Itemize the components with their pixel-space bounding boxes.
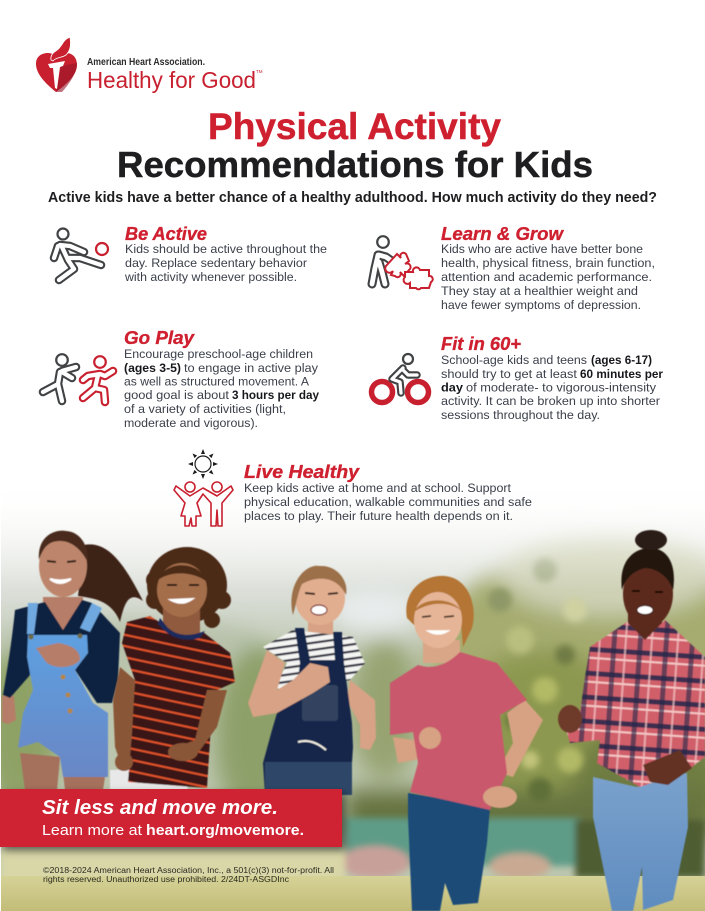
body text: School-age kids and teens (441, 353, 587, 367)
body text: should try to get at least (441, 367, 578, 381)
text: American Heart Association: American Heart Association. (87, 56, 205, 68)
body text: places to play. Their future health depends on it. (244, 509, 513, 523)
body text: physical education, walkable communities and safe (244, 495, 532, 509)
body text: as well as structured movement. A (124, 374, 310, 388)
body text: day. Replace sedentary behavior (125, 256, 307, 270)
banner headline: Sit less and move more. (42, 797, 278, 819)
footer copyright: ©2018-2024 American Heart Association, Inc., a 501(c)(3) not-for-profit. All (43, 866, 334, 875)
body text: sessions throughout the day. (441, 408, 600, 422)
body text: (ages 3-5) (124, 361, 181, 375)
banner: Sit less and move more (0, 789, 342, 847)
banner link text (42, 822, 304, 839)
body text: of a variety of activities (light, (124, 402, 286, 416)
kid 1: blue overalls (2, 531, 143, 790)
footer copyright (43, 866, 334, 884)
body text: Keep kids active at home and at school. Support (244, 481, 512, 495)
heading: Live Healthy (244, 462, 360, 482)
kid 5: plaid shirt and light jeans (558, 530, 705, 911)
text: trademark: TM (256, 69, 263, 74)
body text (124, 347, 319, 430)
body text: Kids who are active have better bone (441, 242, 643, 256)
heading: Fit in 60+ (441, 334, 521, 354)
icon: two kids running (43, 354, 113, 402)
title: Recommendations for Kids: Recommendations for Kids (117, 144, 593, 185)
banner link text: heart.org/movemore. (146, 822, 304, 839)
body text (441, 242, 655, 312)
kid 4: pink t-shirt and blue jeans (390, 576, 543, 911)
panel: Be Active (54, 224, 327, 284)
text: Healthy for Good: Healthy for Good (87, 67, 256, 93)
body text: moderate and vigorous). (124, 416, 258, 430)
icon: kid on bicycle (372, 354, 428, 402)
icon: heart and torch (36, 37, 77, 92)
icon: kid kicking ball (54, 228, 108, 280)
panel: Live Healthy (174, 449, 532, 526)
panel: Go Play (43, 328, 319, 430)
body text: (ages 6-17) (591, 353, 652, 367)
body text: 60 minutes per (580, 367, 663, 381)
heading: Be Active (125, 224, 207, 244)
subtitle: Active kids have a better chance of a healthy adulthood. How much activity do they need? (48, 190, 657, 206)
heading: Go Play (124, 328, 195, 348)
body text (441, 353, 663, 422)
photo: five kids running in a park (1, 522, 705, 911)
body text: health, physical fitness, brain function, (441, 256, 655, 270)
body text: 3 hours per day (232, 388, 319, 402)
body text (244, 481, 532, 523)
banner link text: Learn more at (42, 822, 143, 839)
title: Physical Activity: Physical Activity (208, 106, 501, 147)
body text: Kids should be active throughout the (125, 242, 327, 256)
kid 3: white striped tee and dark overalls (248, 566, 376, 795)
body text: activity. It can be broken up into shorter (441, 394, 660, 408)
body text: have fewer symptoms of depression. (441, 298, 641, 312)
body text: Encourage preschool-age children (124, 347, 313, 361)
body text: to engage in active play (184, 361, 319, 375)
photo background: sky, trees and lawn (1, 522, 705, 911)
panel: Fit in 60+ (372, 334, 663, 422)
kid 2: striped shirt and curly hair (110, 547, 235, 795)
logo: American Heart Association Healthy for Good (36, 37, 263, 93)
body text: day (441, 380, 463, 394)
body text: They stay at a healthier weight and (441, 284, 638, 298)
footer copyright: rights reserved. Unauthorized use prohibited. 2/24DT-ASGDInc (43, 875, 289, 884)
icon: sun over two children holding hands (174, 449, 233, 526)
body text: good goal is about (124, 388, 230, 402)
panel: Learn & Grow (372, 224, 655, 312)
body text (124, 242, 327, 284)
body text: with activity whenever possible. (124, 270, 297, 284)
body text: attention and academic performance. (441, 270, 652, 284)
body text: of moderate- to vigorous-intensity (466, 380, 657, 394)
icon: kid with puzzle pieces (372, 236, 433, 289)
heading: Learn & Grow (441, 224, 564, 244)
